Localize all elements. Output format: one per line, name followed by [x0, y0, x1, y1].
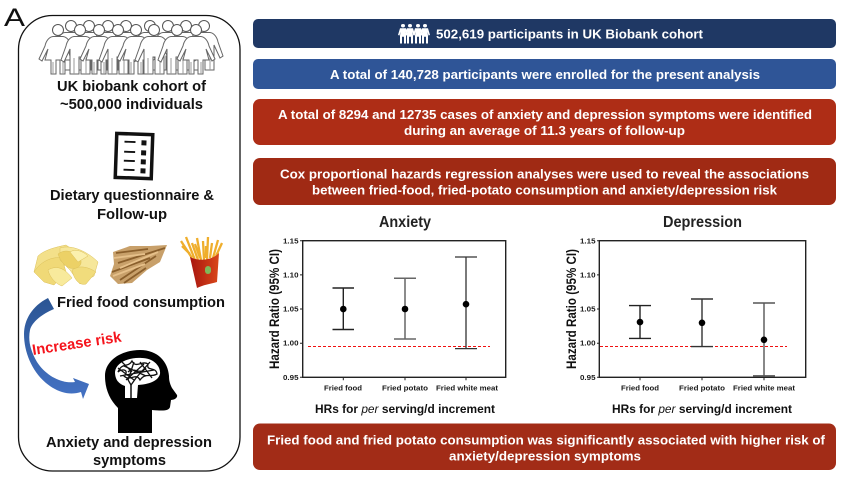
y axis ticks and labels: 0.95: [580, 373, 596, 382]
text: cohort: UK biobank cohort of: [57, 78, 207, 95]
x axis title: HRs for per serving/d increment: [315, 402, 495, 416]
x axis title: HRs for per serving/d increment: [612, 402, 792, 416]
error bar: fried white meat: [753, 303, 775, 376]
text: questionnaire: Dietary questionnaire &: [50, 187, 214, 204]
error bar: fried potato: [691, 299, 713, 347]
category labels: [621, 384, 796, 392]
category labels: Fried potato: [679, 384, 726, 392]
banner: methods: [253, 158, 836, 205]
chart: anxiety hazard ratios: [267, 214, 506, 416]
y axis title: Hazard Ratio (95% CI): [564, 249, 579, 369]
banner: conclusion: Fried food and fried potato consumption was significantly associated with higher risk of: [267, 432, 826, 448]
category labels: Fried potato: [382, 384, 429, 392]
chart: depression hazard ratios: [564, 214, 806, 416]
icon: questionnaire: [115, 133, 153, 179]
banner: cohort participants: [253, 19, 836, 48]
y axis ticks and labels: 1.05: [283, 305, 298, 314]
category labels: Fried food: [621, 384, 659, 392]
category labels: Fried white meat: [436, 384, 499, 392]
chart title: Anxiety: [379, 214, 431, 231]
arrow: increase risk: [24, 298, 89, 399]
banner: cases: during an average of 11.3 years of follow-up: [404, 123, 685, 138]
icon: crowd of people: [39, 20, 223, 74]
error bar: fried white meat: [455, 257, 477, 349]
text: outcome: [46, 434, 212, 469]
category labels: Fried white meat: [733, 384, 796, 392]
error bar: fried potato: [394, 278, 416, 339]
text: cohort: [57, 78, 207, 113]
error bar: fried food: [332, 288, 354, 330]
banner: enrolled: [253, 59, 836, 89]
y axis ticks and labels: 1.10: [283, 270, 298, 279]
y axis ticks and labels: 0.95: [283, 373, 298, 382]
banner: conclusion: [253, 424, 836, 470]
label: increase risk: Increase risk: [31, 329, 123, 359]
reference line: [600, 346, 787, 348]
banner: enrolled: A total of 140,728 participants were enrolled for the present analysis: [330, 67, 760, 82]
y axis ticks and labels: 1.05: [580, 305, 596, 314]
icon: people: [398, 24, 430, 44]
y axis ticks and labels: 1.00: [283, 339, 298, 348]
error bar: fried food: [629, 306, 651, 338]
category labels: Fried food: [324, 384, 362, 392]
category labels: [324, 384, 499, 392]
axes: [303, 241, 506, 377]
banner: methods: Cox proportional hazards regression analyses were used to reveal the associations: [280, 166, 809, 182]
y axis title: Hazard Ratio (95% CI): [267, 249, 282, 369]
icon: fried meat strips: [110, 245, 167, 284]
banner: conclusion: anxiety/depression symptoms: [449, 448, 641, 464]
banner: cohort participants: 502,619 participants in UK Biobank cohort: [436, 26, 704, 42]
banner: cases: [253, 99, 836, 145]
reference line: [308, 346, 490, 348]
panel: study design: [18, 16, 240, 471]
panel label: A: A: [4, 4, 25, 32]
axes: [599, 241, 806, 377]
chart title: Depression: [663, 214, 742, 231]
text: outcome: symptoms: [93, 452, 166, 469]
text: cohort: ~500,000 individuals: [60, 96, 203, 113]
text: fried food consumption: Fried food consumption: [57, 294, 225, 311]
y axis ticks and labels: 1.15: [580, 236, 596, 245]
y axis ticks and labels: 1.10: [580, 270, 596, 279]
icon: potato chips: [34, 245, 98, 286]
y axis ticks and labels: 1.15: [283, 236, 298, 245]
icon: french fries: [181, 237, 222, 288]
y axis ticks and labels: 1.00: [580, 339, 596, 348]
text: questionnaire: [50, 187, 214, 223]
text: questionnaire: Follow-up: [97, 206, 167, 223]
banner: methods: between fried-food, fried-potato consumption and anxiety/depression risk: [312, 182, 778, 198]
icon: head with tangled brain: [105, 350, 177, 433]
text: outcome: Anxiety and depression: [46, 434, 212, 451]
y axis ticks and labels: [283, 236, 466, 382]
banner: cases: A total of 8294 and 12735 cases of anxiety and depression symptoms were identified: [278, 107, 812, 122]
y axis ticks and labels: [580, 236, 764, 382]
